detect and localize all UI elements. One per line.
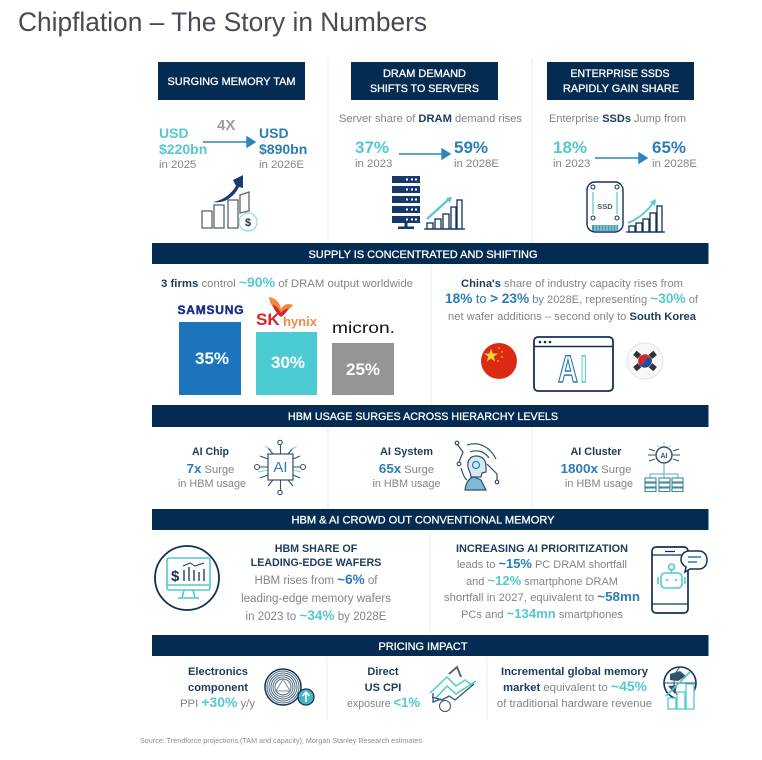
- text: incremental global memory: Incremental global memory: [501, 666, 649, 678]
- heading: enterprise SSDs: RAPIDLY GAIN SHARE: [563, 83, 679, 95]
- banner: supply is concentrated and shifting: [152, 243, 708, 264]
- text: HBM share: leading-edge memory wafers: [241, 593, 391, 605]
- panel: DRAM demand shifts to servers: [339, 62, 522, 229]
- stat: 18% in 2023: 18%: [553, 138, 587, 157]
- heading: DRAM demand shifts to servers: [351, 62, 498, 100]
- stat: USD 220bn in 2025: USD: [159, 125, 189, 141]
- icon: China flag: [481, 343, 517, 379]
- panel: AI cluster: [560, 442, 683, 492]
- bar: SK hynix 30%: 30%: [271, 353, 305, 372]
- text: AI prioritization: shortfall in 2027, equivalent to ~58mn: [444, 589, 640, 604]
- stat: USD 220bn in 2025: in 2025: [159, 159, 196, 171]
- text: electronics component: component: [188, 682, 248, 694]
- panel: AI chip: [178, 440, 306, 495]
- source note: Source: Trendforce projections (TAM and capacity), Morgan Stanley Research estimates: [140, 738, 423, 745]
- stat: 18% in 2023: in 2023: [553, 158, 590, 170]
- icon: monitor with chart: $: [171, 568, 180, 585]
- panel: DRAM market share: [161, 274, 413, 395]
- panel: direct US CPI: [347, 666, 476, 712]
- panel: China's share: [445, 278, 699, 391]
- text: direct US CPI: [347, 666, 421, 710]
- text: AI system surge: in HBM usage: [372, 478, 440, 490]
- banner: HBM and AI crowd out conventional memory: [152, 509, 708, 530]
- stat: USD 890bn in 2026E: [259, 125, 307, 171]
- banner: supply is concentrated and shifting: SUPPLY IS CONCENTRATED AND SHIFTING: [308, 249, 538, 261]
- stat: 65% in 2028E: [652, 138, 697, 170]
- logo: SK hynix: hynix: [283, 314, 318, 329]
- heading: enterprise SSDs: [547, 62, 694, 100]
- stat: USD 220bn in 2025: $220bn: [159, 141, 207, 157]
- logo: Micron: micron.: [332, 320, 395, 337]
- text: electronics component: PPI +30% y/y: [180, 694, 255, 710]
- banner: HBM and AI crowd out conventional memory: HBM & AI CROWD OUT CONVENTIONAL MEMORY: [292, 514, 555, 526]
- text: AI chip surge: in HBM usage: [178, 478, 246, 490]
- stat: 59% in 2028E: 59%: [454, 138, 488, 157]
- text: direct US CPI: exposure <1%: [347, 694, 421, 710]
- panel: incremental global memory market: [497, 666, 696, 710]
- text: AI cluster surge: [560, 446, 633, 490]
- bar: Micron 25%: [332, 343, 394, 395]
- stat: 59% in 2028E: [454, 138, 499, 170]
- stat: 59% in 2028E: in 2028E: [454, 158, 499, 170]
- heading: DRAM demand shifts to servers: DRAM DEMAND: [383, 68, 466, 80]
- text: incremental global memory: of traditional hardware revenue: [497, 698, 652, 710]
- panel: enterprise SSDs: [547, 62, 697, 232]
- heading: surging memory TAM: SURGING MEMORY TAM: [168, 76, 296, 88]
- text: electronics component: [180, 666, 255, 710]
- icon: phone with robot and chat bubble: [652, 547, 707, 613]
- icon: AI browser window: I: [580, 349, 587, 391]
- panel: surging memory TAM: [158, 62, 307, 231]
- icon: SSD drive with growth chart: [587, 182, 665, 232]
- arrow: [399, 149, 450, 159]
- stat: 37% in 2023: 37%: [355, 138, 389, 157]
- text: AI prioritization: leads to ~15% PC DRAM shortfall: [457, 556, 627, 571]
- stat: 65% in 2028E: 65%: [652, 138, 686, 157]
- logo: Samsung: SAMSUNG: [178, 303, 244, 317]
- bar: Samsung 35%: 35%: [195, 349, 229, 368]
- text: electronics component: Electronics: [188, 666, 248, 678]
- banner: pricing impact: PRICING IMPACT: [378, 641, 468, 653]
- label: 4X multiplier: 4X: [217, 117, 235, 134]
- text: HBM share: in 2023 to ~34% by 2028E: [246, 608, 387, 623]
- text: China's capacity share: net wafer additions – second only to South Korea: [448, 311, 697, 323]
- icon: zig-zag arrows: [430, 667, 476, 712]
- bar: SK hynix 30%: [256, 332, 317, 395]
- text: AI prioritization: and ~12% smartphone DRAM: [466, 573, 618, 588]
- logo: SK hynix: SK: [256, 310, 280, 329]
- icon: SSD drive with growth chart: SSD: [597, 202, 613, 211]
- text: AI chip surge: AI Chip: [192, 446, 229, 458]
- stat: 37% in 2023: in 2023: [355, 158, 392, 170]
- text: China's capacity share: 18% to > 23% by 2028E, representing ~30% of: [445, 290, 699, 306]
- panel: electronics component PPI: [180, 666, 314, 710]
- text: incremental global memory: market equivalent to ~45%: [503, 678, 648, 694]
- text: enterprise SSDs jump: Enterprise SSDs Jump from: [549, 113, 686, 125]
- text: AI chip surge: 7x Surge: [187, 461, 234, 476]
- text: AI system surge: AI System: [380, 446, 433, 458]
- panel: increasing AI prioritization: [444, 543, 707, 621]
- icon: wafer with up arrow: [265, 669, 314, 705]
- stat: USD 890bn in 2026E: $890bn: [259, 141, 307, 157]
- arrow: [203, 137, 255, 147]
- stat: 65% in 2028E: in 2028E: [652, 158, 697, 170]
- icon: monitor with chart: [155, 546, 219, 610]
- icon: AI browser window: A: [558, 349, 578, 391]
- text: AI chip surge: [178, 446, 246, 490]
- text: direct US CPI: US CPI: [365, 682, 401, 694]
- banner: HBM usage surges: [152, 405, 708, 427]
- stat: USD 890bn in 2026E: USD: [259, 125, 289, 141]
- text: AI system surge: [372, 446, 440, 490]
- text: incremental global memory: [497, 666, 652, 710]
- panel: HBM share of leading-edge wafers: [155, 543, 391, 623]
- text: AI cluster surge: in HBM usage: [565, 478, 633, 490]
- panel: AI system: [372, 441, 499, 490]
- logo: SK hynix: [256, 297, 318, 329]
- text: HBM share: LEADING-EDGE WAFERS: [251, 557, 381, 569]
- text: HBM share: HBM SHARE OF: [275, 543, 358, 555]
- stat: USD 890bn in 2026E: in 2026E: [259, 159, 304, 171]
- stat: 37% in 2023: [355, 138, 392, 170]
- bar: Micron 25%: 25%: [346, 360, 380, 379]
- title: Chipflation – The Story in Numbers: [18, 7, 427, 37]
- icon: AI cluster tree: AI: [660, 453, 668, 460]
- icon: AI browser window: [534, 337, 613, 391]
- heading: DRAM demand shifts to servers: SHIFTS TO SERVERS: [370, 83, 479, 95]
- icon: AI head: [455, 441, 499, 490]
- text: server share: Server share of DRAM demand rises: [339, 113, 522, 125]
- bar: Samsung 35%: [179, 322, 241, 395]
- text: AI prioritization: [444, 543, 640, 621]
- text: HBM share: [241, 543, 391, 623]
- text: AI system surge: 65x Surge: [379, 461, 434, 476]
- icon: globe with growth bars: [664, 667, 696, 709]
- arrow: [595, 153, 647, 163]
- stat: 18% in 2023: [553, 138, 590, 170]
- heading: surging memory TAM: [158, 62, 305, 100]
- text: China's capacity share: China's share of industry capacity rises from: [461, 278, 683, 290]
- icon: rising bars with dollar coin: [202, 175, 257, 231]
- banner: pricing impact: [152, 635, 708, 656]
- icon: AI chip: AI: [273, 459, 288, 476]
- stat: USD 220bn in 2025: [159, 125, 207, 171]
- text: AI cluster surge: 1800x Surge: [560, 461, 632, 476]
- text: China's capacity share: [445, 278, 699, 323]
- text: AI cluster surge: AI Cluster: [570, 446, 622, 458]
- text: 3 firms control 90%: 3 firms control ~90% of DRAM output worldwide: [161, 274, 413, 290]
- icon: rising bars with dollar coin: $: [245, 217, 251, 229]
- icon: South Korea flag: [627, 343, 663, 379]
- text: AI prioritization: PCs and ~134mn smartphones: [461, 606, 623, 621]
- banner: HBM usage surges: HBM USAGE SURGES ACROSS HIERARCHY LEVELS: [288, 411, 558, 423]
- text: direct US CPI: Direct: [367, 666, 399, 678]
- text: HBM share: HBM rises from ~6% of: [254, 572, 378, 587]
- heading: enterprise SSDs: ENTERPRISE SSDS: [570, 68, 670, 80]
- text: AI prioritization: INCREASING AI PRIORITIZATION: [456, 543, 628, 555]
- icon: server rack with growth chart: [392, 176, 465, 229]
